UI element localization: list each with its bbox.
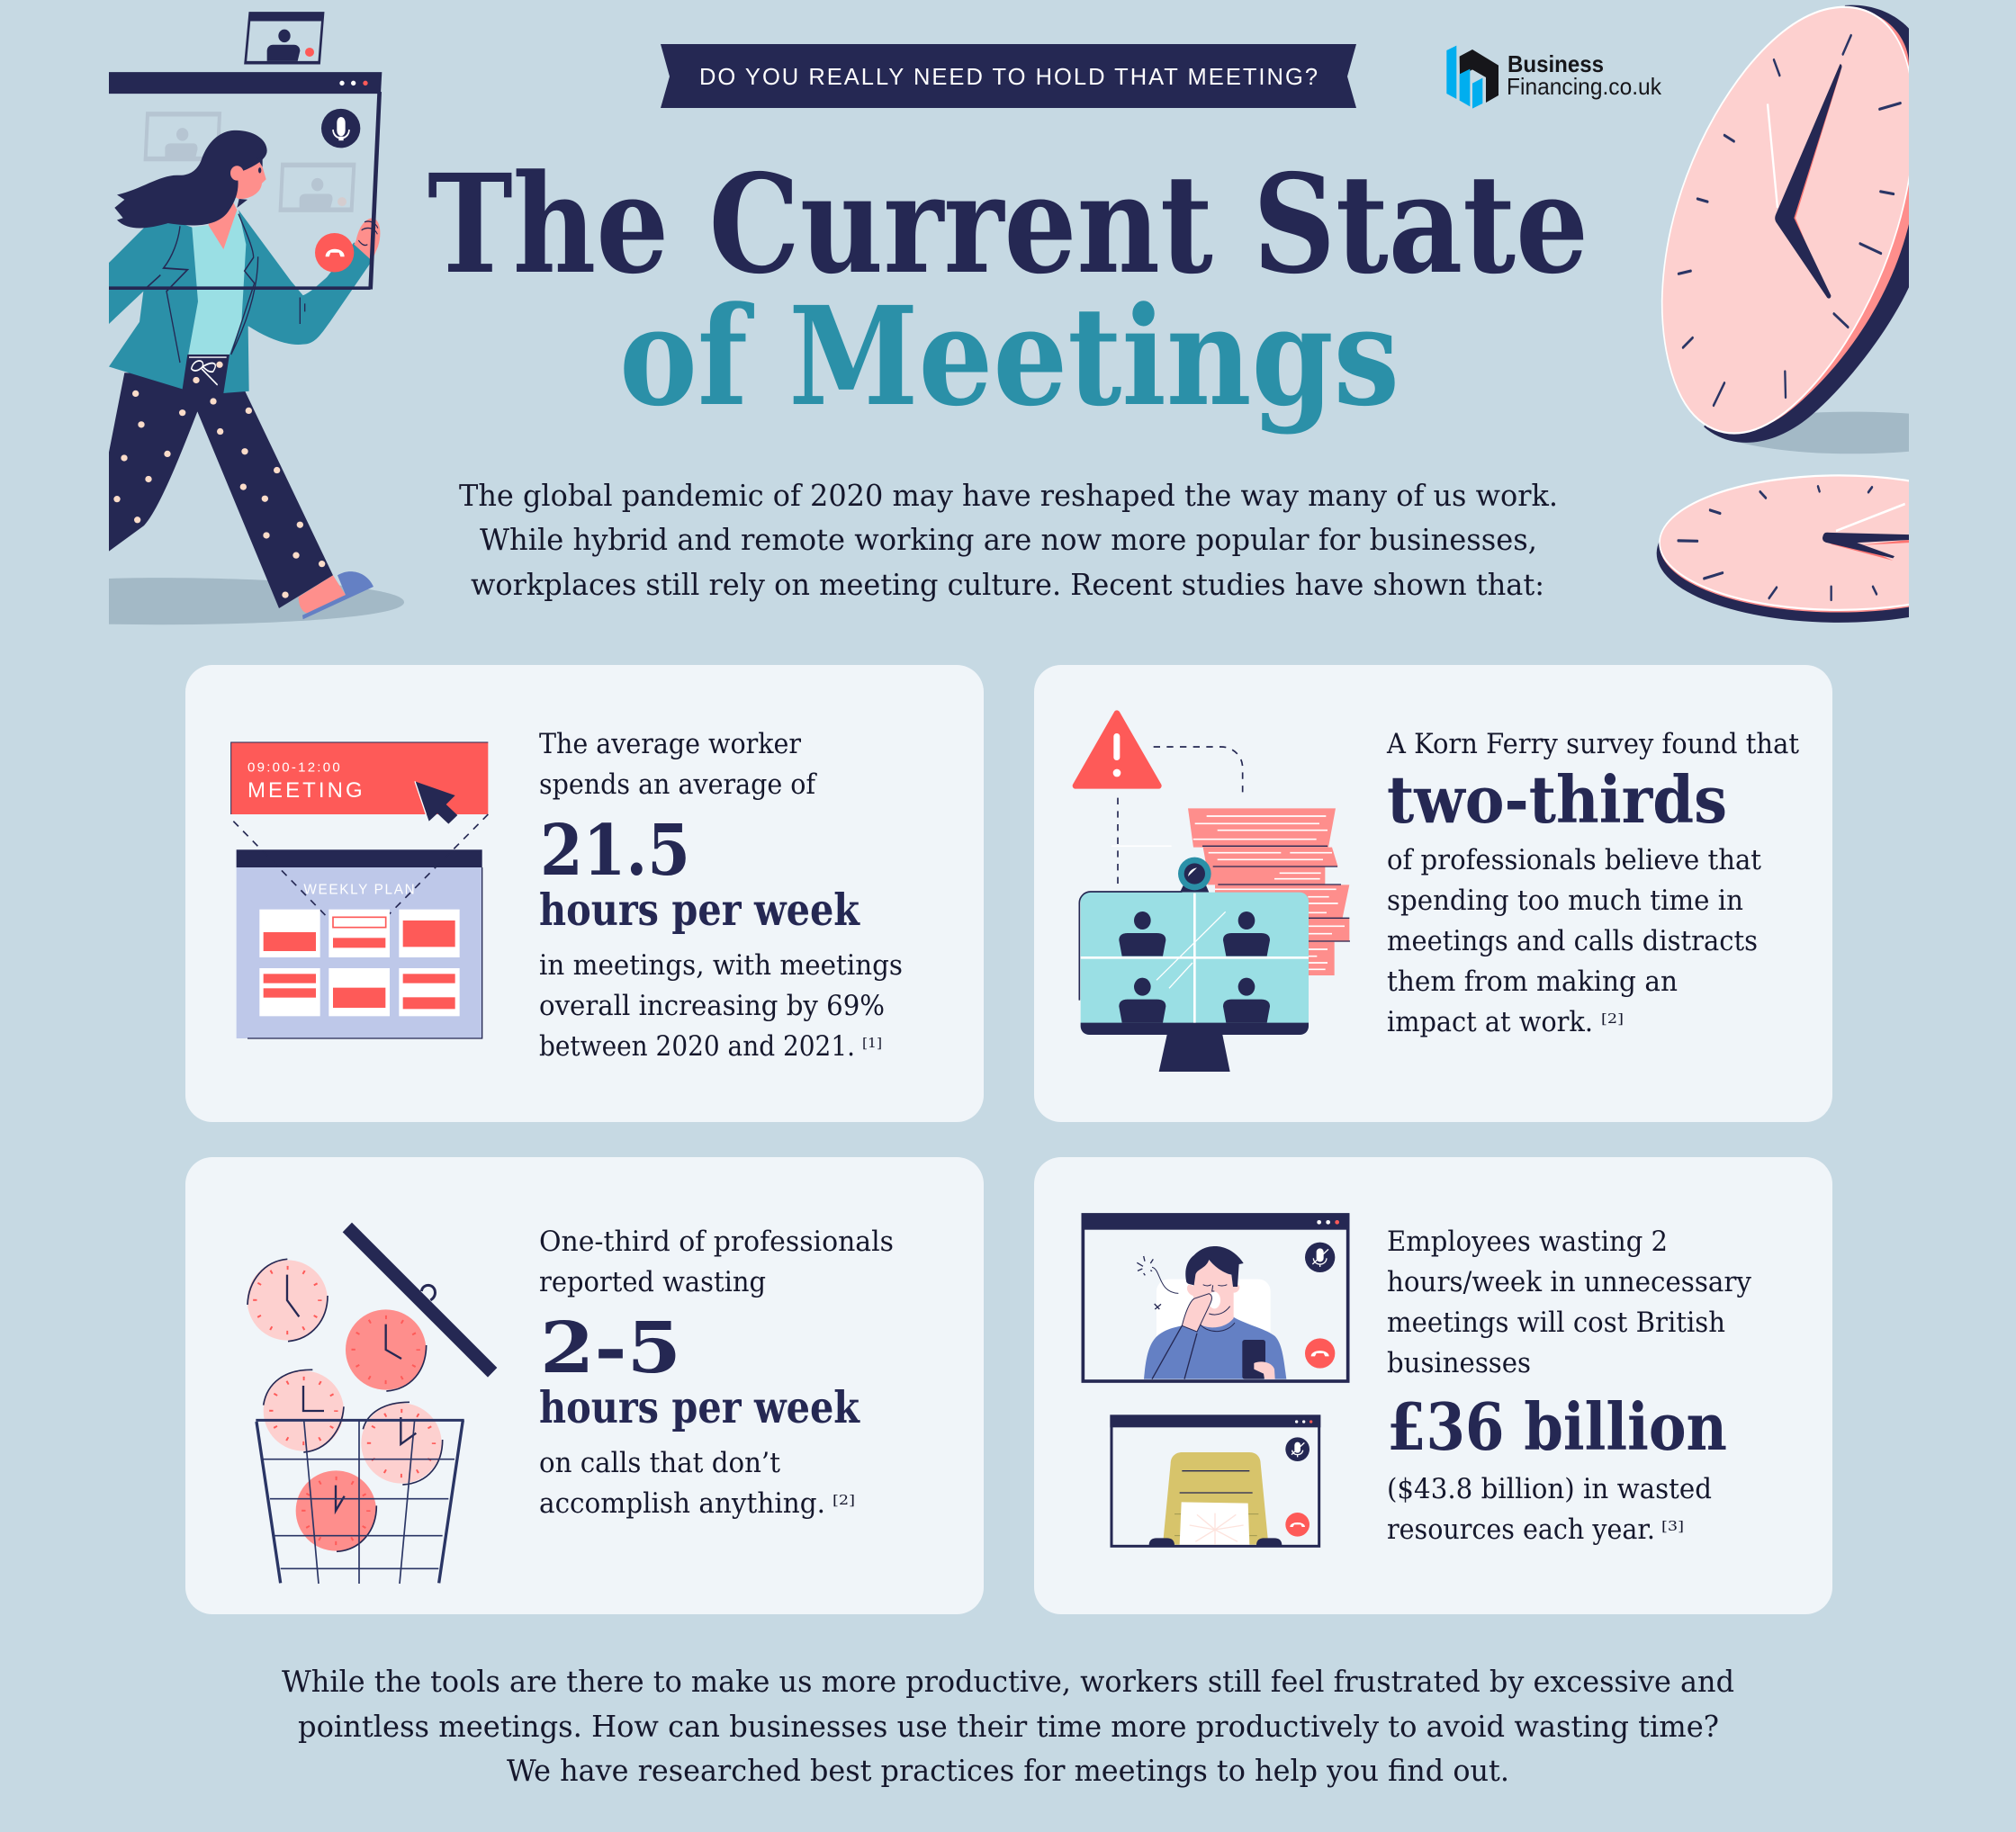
text block: 2-5 hours: One-third of professionals	[539, 1226, 894, 1258]
intro text block	[459, 478, 1558, 602]
text block: 21.5 hours: in meetings, with meetings	[539, 949, 903, 982]
text block: £36 billion: ($43.8 billion) in wasted	[1387, 1473, 1712, 1505]
title: The Current State	[428, 144, 1588, 304]
panel: £36 billion	[1034, 1157, 1832, 1614]
icon: weekly plan calendar: MEETING	[248, 778, 363, 803]
text block: £36 billion: meetings will cost British	[1387, 1307, 1725, 1339]
banner: do you really need to hold that meeting	[661, 44, 1356, 108]
icon: warning and video call monitor	[1076, 714, 1350, 1072]
text block: 2-5 hours: reported wasting	[539, 1266, 766, 1298]
text block: £36 billion: Employees wasting 2	[1387, 1226, 1668, 1258]
text block: two-thirds: two-thirds	[1387, 761, 1727, 838]
title: of Meetings	[619, 276, 1400, 436]
intro text block: workplaces still rely on meeting culture. Recent studies have shown that:	[471, 567, 1544, 602]
icon: video call yawning man and empty chair	[1082, 1213, 1349, 1546]
text block: two-thirds	[1386, 728, 1799, 1038]
illustration: clocks	[1656, 5, 1909, 623]
icon: clocks in waste basket	[248, 1223, 497, 1584]
text block: £36 billion: £36 billion	[1387, 1388, 1727, 1465]
text block: 2-5 hours: [2]	[832, 1492, 855, 1508]
text block: 2-5 hours: on calls that don’t	[539, 1447, 781, 1479]
footer text block	[282, 1664, 1734, 1788]
text block: two-thirds: of professionals believe that	[1387, 844, 1761, 876]
text block: 2-5 hours: accomplish anything.	[539, 1487, 825, 1520]
logo: BusinessFinancing.co.uk	[1446, 46, 1662, 109]
panel: two-thirds	[1034, 665, 1832, 1122]
text block: 2-5 hours	[539, 1226, 894, 1520]
text block: 21.5 hours: [1]	[862, 1035, 882, 1051]
intro text block: The global pandemic of 2020 may have reshaped the way many of us work.	[459, 478, 1558, 513]
text block: 2-5 hours: hours per week	[539, 1381, 860, 1433]
text block: 21.5 hours: overall increasing by 69%	[539, 990, 885, 1022]
text block: 21.5 hours: hours per week	[539, 884, 860, 936]
panel: 2-5 hours per week	[185, 1157, 984, 1614]
text block: £36 billion: [3]	[1661, 1518, 1684, 1534]
text block: two-thirds: [2]	[1601, 1010, 1624, 1027]
text block: two-thirds: A Korn Ferry survey found that	[1386, 728, 1799, 760]
text block: two-thirds: them from making an	[1387, 965, 1678, 998]
text block: two-thirds: spending too much time in	[1387, 885, 1743, 917]
logo: BusinessFinancing.co.uk: Business	[1508, 50, 1604, 77]
footer text block: We have researched best practices for meetings to help you find out.	[507, 1753, 1509, 1788]
text block: 21.5 hours: between 2020 and 2021.	[539, 1030, 855, 1063]
illustration: woman walking out of video call	[109, 13, 404, 624]
text block: £36 billion: hours/week in unnecessary	[1387, 1266, 1751, 1298]
text block: 21.5 hours: 21.5	[540, 810, 690, 892]
text block: £36 billion	[1387, 1226, 1751, 1546]
banner: do you really need to hold that meeting: DO YOU REALLY NEED TO HOLD THAT MEETING?	[699, 65, 1318, 90]
icon: weekly plan calendar: WEEKLY PLAN	[303, 882, 415, 897]
icon: weekly plan calendar: 09:00-12:00	[248, 759, 340, 775]
icon: weekly plan calendar	[231, 742, 488, 1038]
text block: two-thirds: impact at work.	[1387, 1006, 1593, 1038]
footer text block: While the tools are there to make us more productive, workers still feel frustrated by excessive and	[282, 1664, 1734, 1699]
title	[428, 144, 1588, 436]
text block: 21.5 hours: spends an average of	[539, 768, 817, 801]
text block: £36 billion: resources each year.	[1387, 1513, 1655, 1546]
logo: BusinessFinancing.co.uk: Financing.co.uk	[1507, 73, 1662, 100]
text block: 21.5 hours: The average worker	[539, 728, 801, 760]
text block: two-thirds: meetings and calls distracts	[1387, 925, 1758, 957]
footer text block: pointless meetings. How can businesses use their time more productively to avoid wasting time?	[298, 1709, 1719, 1744]
text block: 2-5 hours: 2-5	[540, 1307, 681, 1389]
intro text block: While hybrid and remote working are now more popular for businesses,	[480, 522, 1537, 557]
text block: £36 billion: businesses	[1387, 1347, 1531, 1379]
panel: 21.5 hours per week	[185, 665, 984, 1122]
text block: 21.5 hours	[539, 728, 903, 1063]
